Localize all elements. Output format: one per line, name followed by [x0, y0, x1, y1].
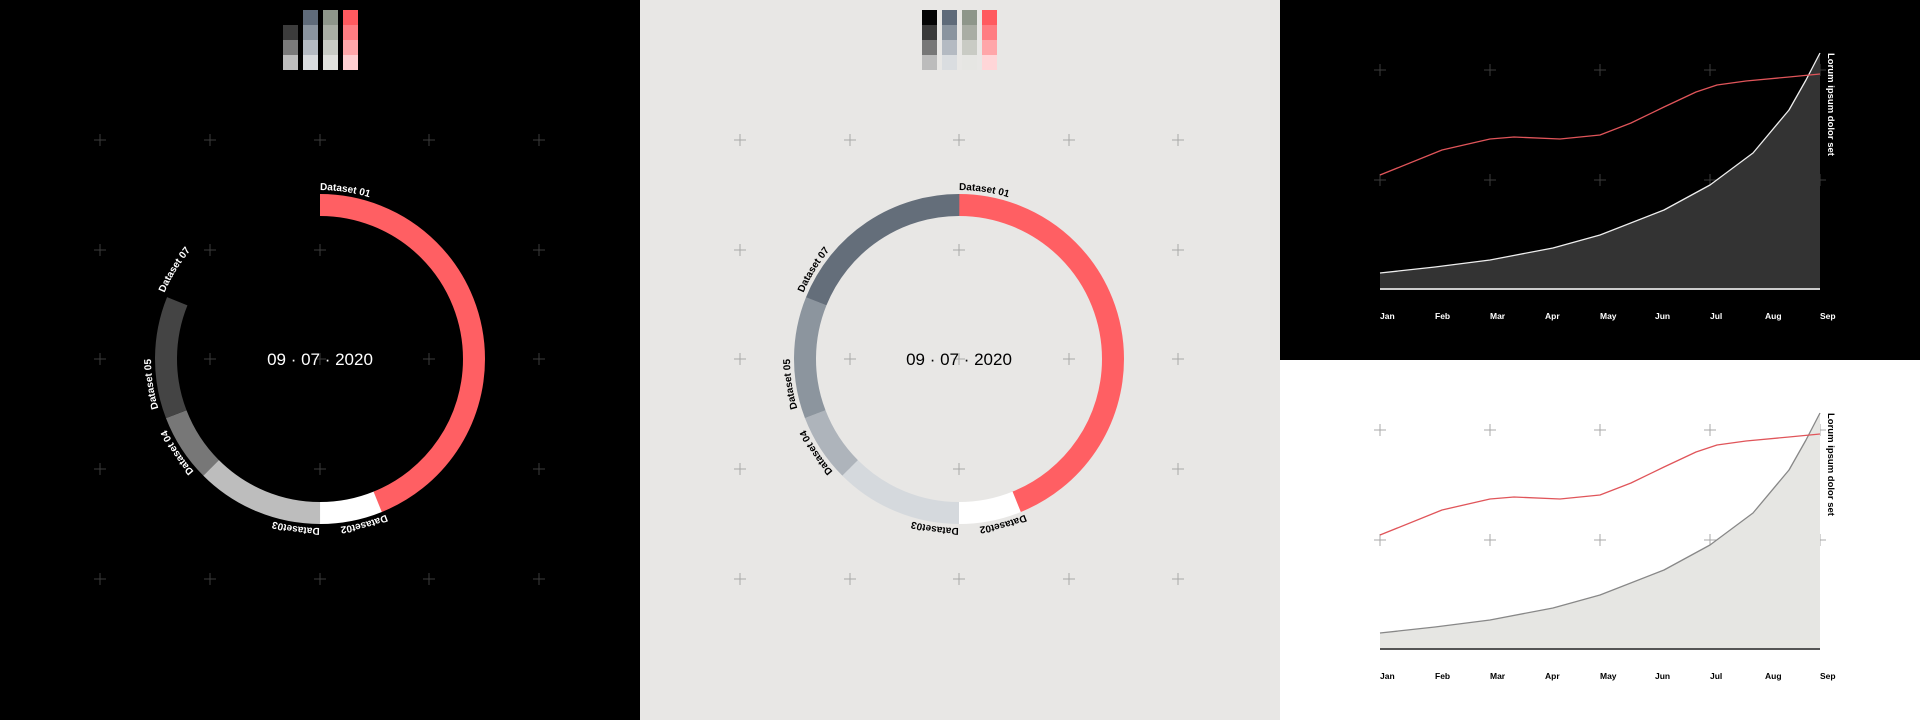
donut labels dark: Dataset 01 — [320, 183, 370, 198]
grid crosses dark — [94, 134, 545, 585]
month labels light: Sep — [1820, 671, 1836, 681]
grid crosses light — [734, 134, 1184, 585]
donut labels light — [783, 183, 1027, 535]
month labels light — [1380, 671, 1836, 681]
red line dark — [1380, 74, 1820, 175]
panel: light donut — [640, 0, 1280, 720]
area series dark — [1380, 53, 1820, 289]
month labels dark: Mar — [1490, 311, 1506, 321]
donut chart dark — [102, 141, 538, 577]
donut labels light: Dataset03 — [911, 522, 958, 535]
month labels light: Mar — [1490, 671, 1506, 681]
donut labels light: Dataset 04 — [800, 430, 832, 476]
palette swatches light — [922, 10, 997, 70]
month labels dark: Aug — [1765, 311, 1782, 321]
donut labels dark: Dataset 04 — [160, 430, 194, 476]
area series light — [1380, 413, 1820, 649]
grid crosses chart dark — [1374, 64, 1826, 186]
red line light — [1380, 434, 1820, 535]
baseline dark — [1380, 288, 1820, 290]
donut labels light: Dataset 01 — [960, 183, 1008, 198]
panel: light area chart — [1280, 360, 1920, 720]
donut labels dark: Dataset02 — [340, 514, 388, 534]
month labels light: Jun — [1655, 671, 1670, 681]
date light: 09 · 07 · 2020 — [906, 350, 1012, 369]
date dark: 09 · 07 · 2020 — [267, 350, 373, 369]
donut labels light: Dataset 05 — [783, 359, 798, 410]
month labels dark: Jul — [1710, 311, 1722, 321]
month labels dark: Jan — [1380, 311, 1395, 321]
donut labels dark — [144, 183, 388, 535]
baseline light — [1380, 648, 1820, 650]
donut labels dark: Dataset03 — [272, 522, 320, 535]
axis label dark: Lorum ipsum dolor set — [1825, 53, 1836, 157]
month labels light: Aug — [1765, 671, 1782, 681]
donut chart light — [741, 141, 1177, 577]
month labels dark: Sep — [1820, 311, 1836, 321]
month labels dark: Feb — [1435, 311, 1450, 321]
month labels dark: Jun — [1655, 311, 1670, 321]
donut labels dark: Dataset 07 — [158, 246, 189, 292]
palette swatches dark — [283, 10, 358, 70]
donut labels light: Dataset02 — [980, 514, 1027, 534]
donut labels dark: Dataset 05 — [144, 359, 158, 410]
month labels dark — [1380, 311, 1836, 321]
month labels dark: May — [1600, 311, 1617, 321]
month labels light: Apr — [1545, 671, 1560, 681]
axis label light: Lorum ipsum dolor set — [1825, 413, 1836, 517]
panel: dark area chart — [1280, 0, 1920, 360]
grid crosses chart light — [1374, 424, 1826, 546]
month labels light: Jan — [1380, 671, 1395, 681]
month labels light: May — [1600, 671, 1617, 681]
month labels dark: Apr — [1545, 311, 1560, 321]
donut labels light: Dataset 07 — [797, 246, 828, 292]
month labels light: Jul — [1710, 671, 1722, 681]
panel: dark donut — [94, 10, 545, 585]
month labels light: Feb — [1435, 671, 1450, 681]
